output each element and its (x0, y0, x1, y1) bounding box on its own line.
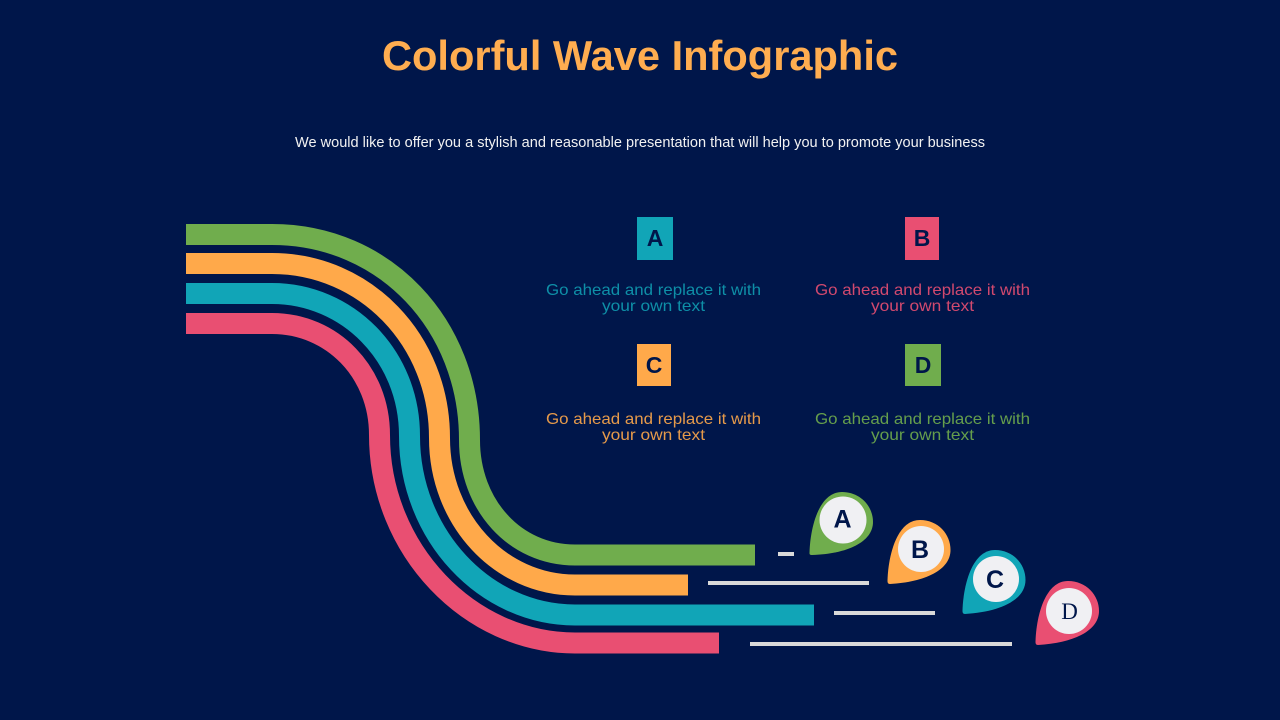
text C: Go ahead and replace it with (546, 411, 761, 428)
wave ribbons (186, 234, 814, 643)
badge letter A: A (647, 225, 663, 251)
pin B: B (911, 536, 929, 564)
text B: your own text (871, 298, 975, 315)
badge D (905, 344, 941, 386)
pin D (1036, 581, 1099, 645)
connector line C (834, 611, 935, 615)
badge B (905, 217, 939, 260)
connector line B (708, 581, 869, 585)
ribbon: pink (186, 324, 719, 643)
legend item A (546, 217, 761, 315)
badge C (637, 344, 671, 386)
text A: Go ahead and replace it with (546, 282, 761, 299)
connector line A (778, 552, 794, 556)
pin D: D (1061, 599, 1078, 624)
ribbon: teal (186, 294, 814, 615)
pin C (962, 550, 1026, 614)
legend item B (815, 217, 1030, 315)
pin A (810, 492, 873, 555)
text B: Go ahead and replace it with (815, 282, 1030, 299)
badge letter D: D (915, 352, 931, 378)
legend item C (546, 344, 761, 444)
badge A (637, 217, 673, 260)
badge letter C: C (646, 352, 662, 378)
legend item D (815, 344, 1030, 444)
ribbon: orange (186, 264, 688, 585)
text C: your own text (602, 427, 706, 444)
pin A: A (833, 506, 852, 534)
text D: Go ahead and replace it with (815, 411, 1030, 428)
ribbon: green (186, 234, 755, 555)
pin C: C (986, 566, 1004, 594)
text D: your own text (871, 427, 975, 444)
subtitle: We would like to offer you a stylish and reasonable presentation that will help you to promote your business (295, 135, 985, 151)
connector line D (750, 642, 1012, 646)
text A: your own text (602, 298, 706, 315)
badge letter B: B (914, 225, 930, 251)
pin B (888, 520, 950, 584)
title: Colorful Wave Infographic (382, 32, 898, 79)
